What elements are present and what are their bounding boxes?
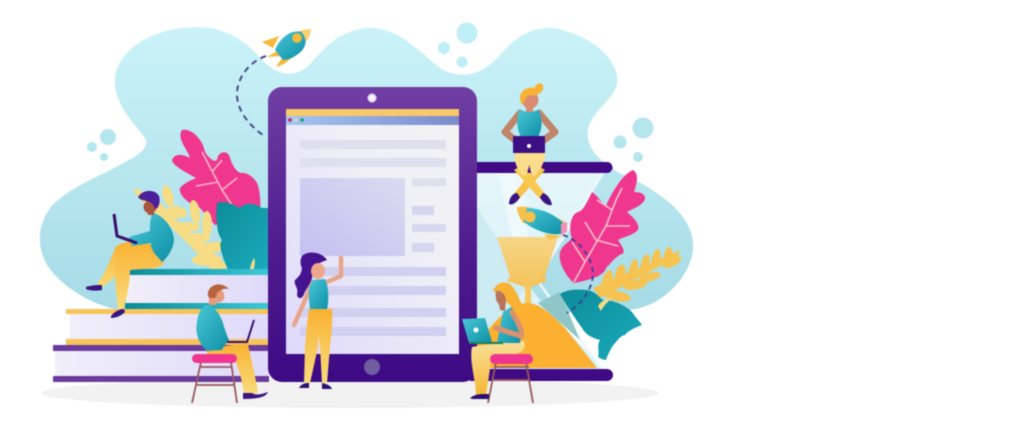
dashed path: lower rocket xyxy=(563,235,593,313)
bubbles: right xyxy=(614,118,654,162)
shoe xyxy=(111,309,125,318)
head xyxy=(520,83,543,112)
screen xyxy=(286,109,459,354)
back leg xyxy=(97,246,134,287)
person: woman on stool right xyxy=(462,282,533,403)
raised arm xyxy=(325,258,341,283)
hair xyxy=(295,253,327,298)
camera xyxy=(368,94,376,102)
hourglass xyxy=(470,162,613,381)
glass shade xyxy=(538,292,580,340)
top book xyxy=(125,269,269,309)
head xyxy=(138,191,160,215)
laptop xyxy=(114,214,137,243)
laptop xyxy=(227,320,254,342)
side text lines xyxy=(412,178,446,252)
leaf: pink right xyxy=(560,170,645,283)
text lines bottom xyxy=(300,267,446,336)
laptop xyxy=(462,318,503,344)
face xyxy=(496,291,506,311)
rocket: top xyxy=(262,29,311,67)
bubbles: top xyxy=(438,22,478,68)
pants xyxy=(304,309,332,383)
glass xyxy=(477,173,603,369)
torso xyxy=(129,213,174,262)
tablet body xyxy=(268,87,477,382)
crossed legs xyxy=(513,165,545,199)
bottom bar xyxy=(470,369,613,381)
laptop xyxy=(513,136,545,153)
title bar xyxy=(286,109,459,125)
legs xyxy=(471,341,525,396)
ground shadow xyxy=(41,378,659,408)
head xyxy=(208,284,229,305)
glass right edge xyxy=(537,173,603,368)
shoes xyxy=(243,392,268,399)
bottom book xyxy=(53,345,269,382)
lowered arm xyxy=(294,282,313,325)
arm xyxy=(496,312,521,336)
text lines top xyxy=(300,140,446,167)
shoes xyxy=(470,394,489,399)
shoes xyxy=(299,383,332,389)
leaf: teal left xyxy=(216,202,268,270)
background blob xyxy=(40,27,693,312)
leaf: pale yellow left xyxy=(134,184,237,270)
leg xyxy=(206,344,258,394)
torso xyxy=(497,306,521,343)
torso xyxy=(196,305,229,351)
shoes xyxy=(509,193,552,205)
hair xyxy=(493,282,524,316)
sand stream xyxy=(525,285,531,310)
bubbles: left xyxy=(87,129,116,161)
top xyxy=(309,279,328,310)
leaf: yellow right xyxy=(593,246,683,303)
person: on stool left xyxy=(192,284,268,403)
stool xyxy=(488,354,533,403)
face xyxy=(311,263,325,279)
bottom sand xyxy=(477,303,597,368)
middle book xyxy=(66,309,269,345)
dashed path: top rocket xyxy=(237,56,266,135)
person: sitting on top book xyxy=(86,191,174,318)
tablet xyxy=(268,87,477,382)
image placeholder xyxy=(300,178,405,256)
leaf: teal right xyxy=(560,290,642,360)
leaf: pink left xyxy=(172,130,260,225)
top bar xyxy=(470,162,612,173)
person: woman on hourglass bar xyxy=(505,83,555,205)
books stack xyxy=(53,269,269,382)
thigh and front leg xyxy=(115,241,165,309)
foot xyxy=(86,285,102,291)
person: woman at tablet xyxy=(294,253,341,389)
home button xyxy=(364,359,380,375)
arms xyxy=(505,113,555,140)
torso xyxy=(517,110,542,137)
stool xyxy=(192,354,237,403)
top sand xyxy=(497,237,558,287)
rocket: lower xyxy=(517,207,567,240)
